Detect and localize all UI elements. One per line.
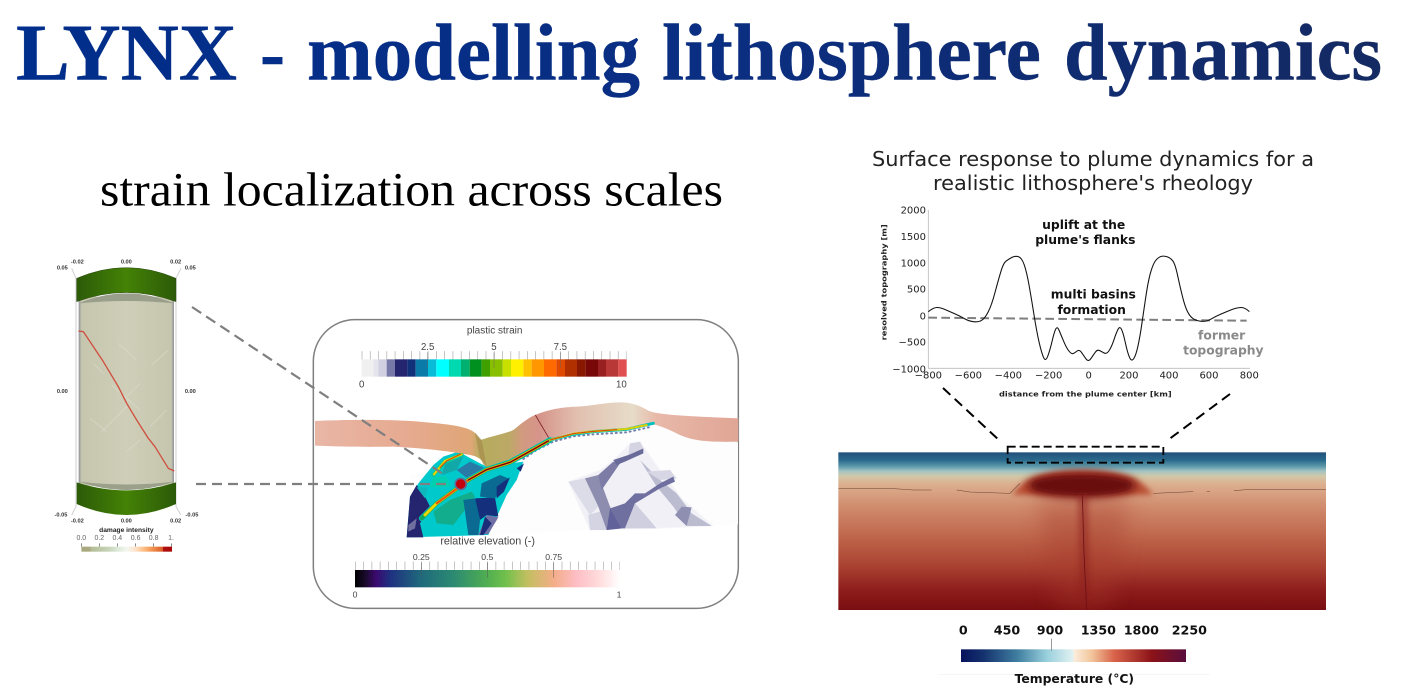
plume body <box>838 470 1326 610</box>
temperature colorbar: 450 <box>994 623 1020 638</box>
dashed connector: cylinder bottom to marker <box>196 483 452 485</box>
annotation: former topography: topography <box>1183 344 1264 358</box>
axis labels: 0.00 <box>185 389 196 395</box>
x tick labels: 600 <box>1199 371 1219 382</box>
plastic strain colorbar: 2.5 <box>421 342 434 353</box>
faint background mesh <box>410 423 738 538</box>
y tick labels: −1000 <box>892 364 926 375</box>
title: lithosphere <box>662 10 1041 98</box>
former topography dashed line <box>928 318 1247 321</box>
x tick labels <box>915 371 1259 382</box>
temperature colorbar: 2250 <box>1172 623 1207 638</box>
annotation: basins: multi basins <box>1051 288 1136 302</box>
y axis title: resolved topography [m] <box>880 224 888 340</box>
heading: strain localization: strain localization across scales <box>100 164 723 216</box>
annotation: former topography: former <box>1198 329 1246 343</box>
temperature colorbar: 0 <box>959 623 968 638</box>
relative elevation colorbar: 0.75 <box>545 552 562 562</box>
x tick labels: −800 <box>915 371 942 382</box>
axis labels: 0.02 <box>170 259 181 265</box>
damage colorbar: 0.2 <box>94 535 104 542</box>
temperature gradient background <box>838 452 1326 610</box>
annotation: uplift: plume's flanks <box>1035 233 1135 247</box>
heading: surface response <box>872 147 1314 195</box>
damage colorbar: 0.8 <box>149 535 159 542</box>
top green platen <box>77 268 176 302</box>
y tick labels: 1500 <box>901 232 926 243</box>
axis labels: 0.05 <box>57 266 68 272</box>
axis labels: 0.05 <box>185 266 196 272</box>
y tick labels: −500 <box>899 338 926 349</box>
x tick labels: −400 <box>995 371 1022 382</box>
right mesh <box>568 442 713 530</box>
x tick labels: −200 <box>1035 371 1062 382</box>
annotation: uplift <box>1035 218 1135 247</box>
plastic strain colorbar <box>359 342 627 390</box>
damage colorbar: damage intensity <box>99 527 154 534</box>
damage colorbar <box>76 527 174 552</box>
axis labels: -0.05 <box>186 512 198 518</box>
panel: rock sample cylinder <box>55 259 198 552</box>
axes <box>928 210 1250 368</box>
elevation belt <box>315 402 738 468</box>
fracture pattern <box>90 343 168 452</box>
title: LYNX <box>16 10 237 98</box>
temperature colorbar: 1350 <box>1081 623 1116 638</box>
x tick labels: 0 <box>1085 371 1092 382</box>
topography line chart <box>880 205 1264 399</box>
temperature label: Temperature (°C) <box>1015 672 1134 686</box>
shear band <box>78 331 174 471</box>
axis labels: 0.00 <box>121 259 132 265</box>
dashed zoom connector right <box>1168 394 1230 440</box>
damage colorbar: 0.0 <box>76 535 86 542</box>
dashed selection box <box>1008 447 1163 463</box>
x axis title: distance from the plume center [km] <box>999 391 1172 399</box>
y tick labels <box>892 205 926 375</box>
fold shading <box>475 432 487 467</box>
title: modelling <box>307 10 640 98</box>
inset border <box>313 320 738 608</box>
temperature colorbar <box>938 623 1210 674</box>
x tick labels: −600 <box>955 371 982 382</box>
cylinder body <box>79 297 174 487</box>
axis labels <box>55 259 198 524</box>
damage colorbar: 1. <box>168 535 174 542</box>
temperature field with plume <box>838 447 1326 686</box>
bounding box frame <box>72 268 181 515</box>
annotation: former topography <box>1183 329 1264 358</box>
damage colorbar: 0.6 <box>131 535 141 542</box>
topography curve <box>928 256 1249 360</box>
axis labels: -0.05 <box>55 512 67 518</box>
dashed connector: cylinder top to marker <box>192 307 446 476</box>
marker: red dot <box>455 478 466 490</box>
temperature colorbar: 900 <box>1037 623 1063 638</box>
left mesh region <box>407 452 524 537</box>
strain band <box>422 423 653 518</box>
title <box>16 10 1382 98</box>
plastic strain colorbar: 0 <box>359 379 364 390</box>
plastic strain colorbar: 7.5 <box>554 342 567 353</box>
relative elevation label: relative elevation (-) <box>440 536 535 548</box>
plastic strain colorbar: 5 <box>491 342 497 353</box>
annotation: basins: formation <box>1057 303 1126 317</box>
panel: rounded inset box <box>313 320 738 608</box>
y tick labels: 1000 <box>901 258 926 269</box>
annotation: uplift: uplift at the <box>1042 218 1125 232</box>
heading: surface response: realistic lithosphere's rheology <box>933 171 1253 195</box>
underside of top platen <box>79 293 174 303</box>
relative elevation colorbar: 0.5 <box>481 552 494 562</box>
relative elevation colorbar: 0.25 <box>413 552 430 562</box>
x tick labels: 400 <box>1159 371 1179 382</box>
top of bottom platen <box>79 482 174 490</box>
x tick labels: 200 <box>1119 371 1139 382</box>
relative elevation colorbar <box>353 552 622 599</box>
relative elevation colorbar: 1 <box>617 589 622 599</box>
plastic strain label: plastic strain <box>467 326 522 337</box>
annotation: basins <box>1051 288 1136 317</box>
axis labels: 0.00 <box>57 389 68 395</box>
heading: surface response: Surface response to plume dynamics for a <box>872 147 1314 171</box>
y tick labels: 0 <box>920 311 926 322</box>
x tick labels: 800 <box>1240 371 1259 382</box>
title: dynamics <box>1064 10 1382 98</box>
relative elevation colorbar: 0 <box>353 589 358 599</box>
y tick labels: 2000 <box>901 205 926 216</box>
axis labels: -0.02 <box>71 259 84 265</box>
bottom platen <box>77 482 176 515</box>
axis labels: 0.00 <box>121 518 132 524</box>
belt fault line <box>535 415 550 440</box>
temperature colorbar: 1800 <box>1124 623 1159 638</box>
axis labels: 0.02 <box>170 518 181 524</box>
axis labels: -0.02 <box>71 518 84 524</box>
damage colorbar: 0.4 <box>112 535 122 542</box>
dashed zoom connector left <box>943 388 1000 441</box>
title: - <box>260 10 285 98</box>
plastic strain colorbar: 10 <box>616 379 627 390</box>
y tick labels: 500 <box>907 285 926 296</box>
